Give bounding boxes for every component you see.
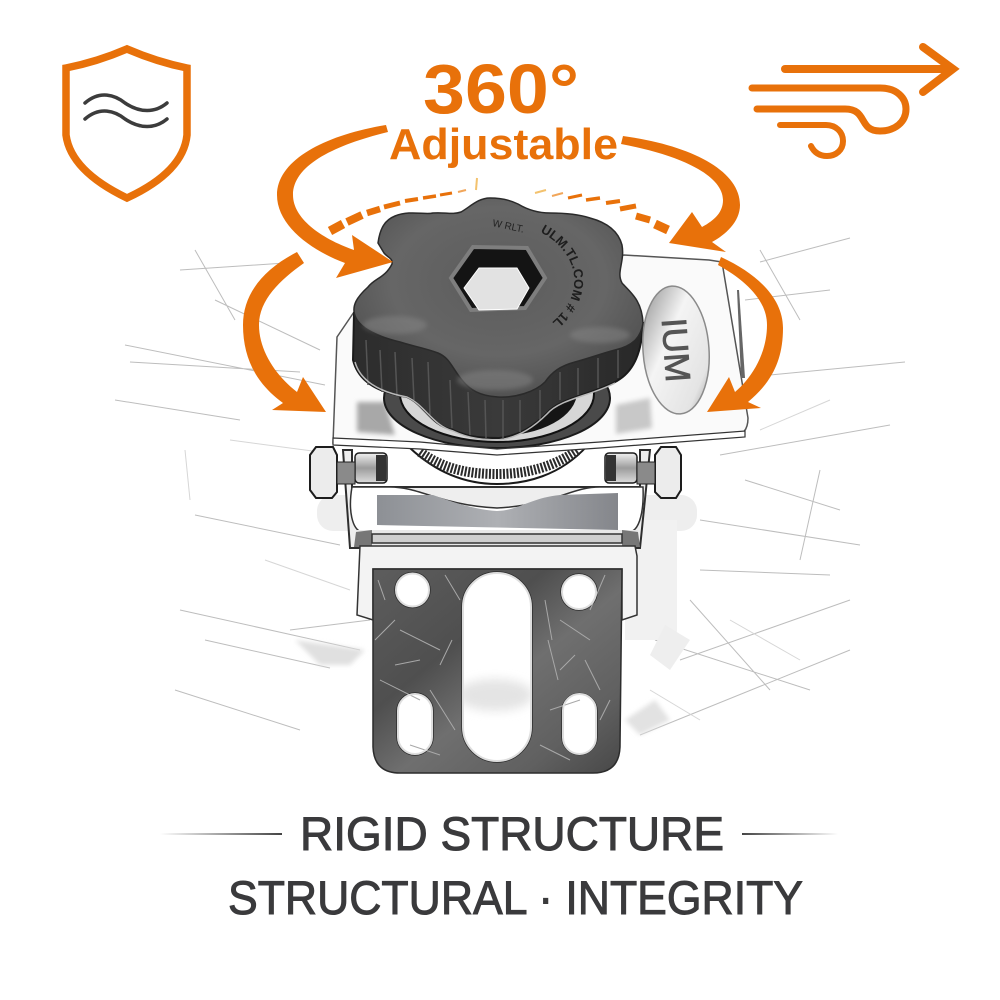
bolt head [655,447,681,498]
upper bracket [343,450,650,548]
dashed rotation arc [330,178,668,231]
hole rims [396,573,596,761]
plate front edge strip [333,431,745,455]
background: technical sketch lines [115,238,905,735]
knob ribbed side [353,313,643,438]
knob side ribs [366,340,618,438]
caption: rigid structure: RIGID STRUCTURE [300,807,724,860]
left hinge bolt [310,447,387,498]
mounting plate [357,546,637,773]
plate chrome top [357,546,637,620]
badge: oval UM stamp [639,284,713,416]
arrow: top left curved [277,125,393,278]
top swivel plate [333,255,748,450]
arrow: lower right curved [707,257,783,412]
knob moulded text: ULM.TL.COM # 1L [542,224,584,326]
bolt head [464,268,529,310]
knob [352,197,644,441]
icon: water-proof shield [66,49,187,198]
knob: W RLT. [491,218,525,236]
plate steel face with holes [373,569,622,773]
knob rim highlight [355,362,615,440]
bolt head [310,447,337,498]
nut [355,453,387,483]
heading: Adjustable: Adjustable [389,120,618,169]
bracket scratched band [377,493,618,530]
knob lighter worn patches [363,316,630,390]
caption: structural integrity: STRUCTURAL · INTEGRITY [228,871,803,924]
icon: wind arrow [752,47,953,156]
plate shading [357,290,745,435]
nut [605,453,637,483]
arrow: top right curved [621,136,740,252]
badge: oval UM stamp: IUM [654,317,697,383]
right hinge bolt [605,447,681,498]
background: faint ghost bracket shapes [295,495,697,735]
arrow: lower left curved [243,252,326,412]
hex socket [451,247,545,310]
upper toothed washer and ring [384,346,610,448]
knob top surface [354,198,643,397]
heading: 360 degrees: 360° [423,50,579,128]
plate scratches [375,575,610,760]
lower toothed washer [410,446,587,484]
bracket arms and body [343,450,650,548]
bracket fold rib [354,530,640,547]
